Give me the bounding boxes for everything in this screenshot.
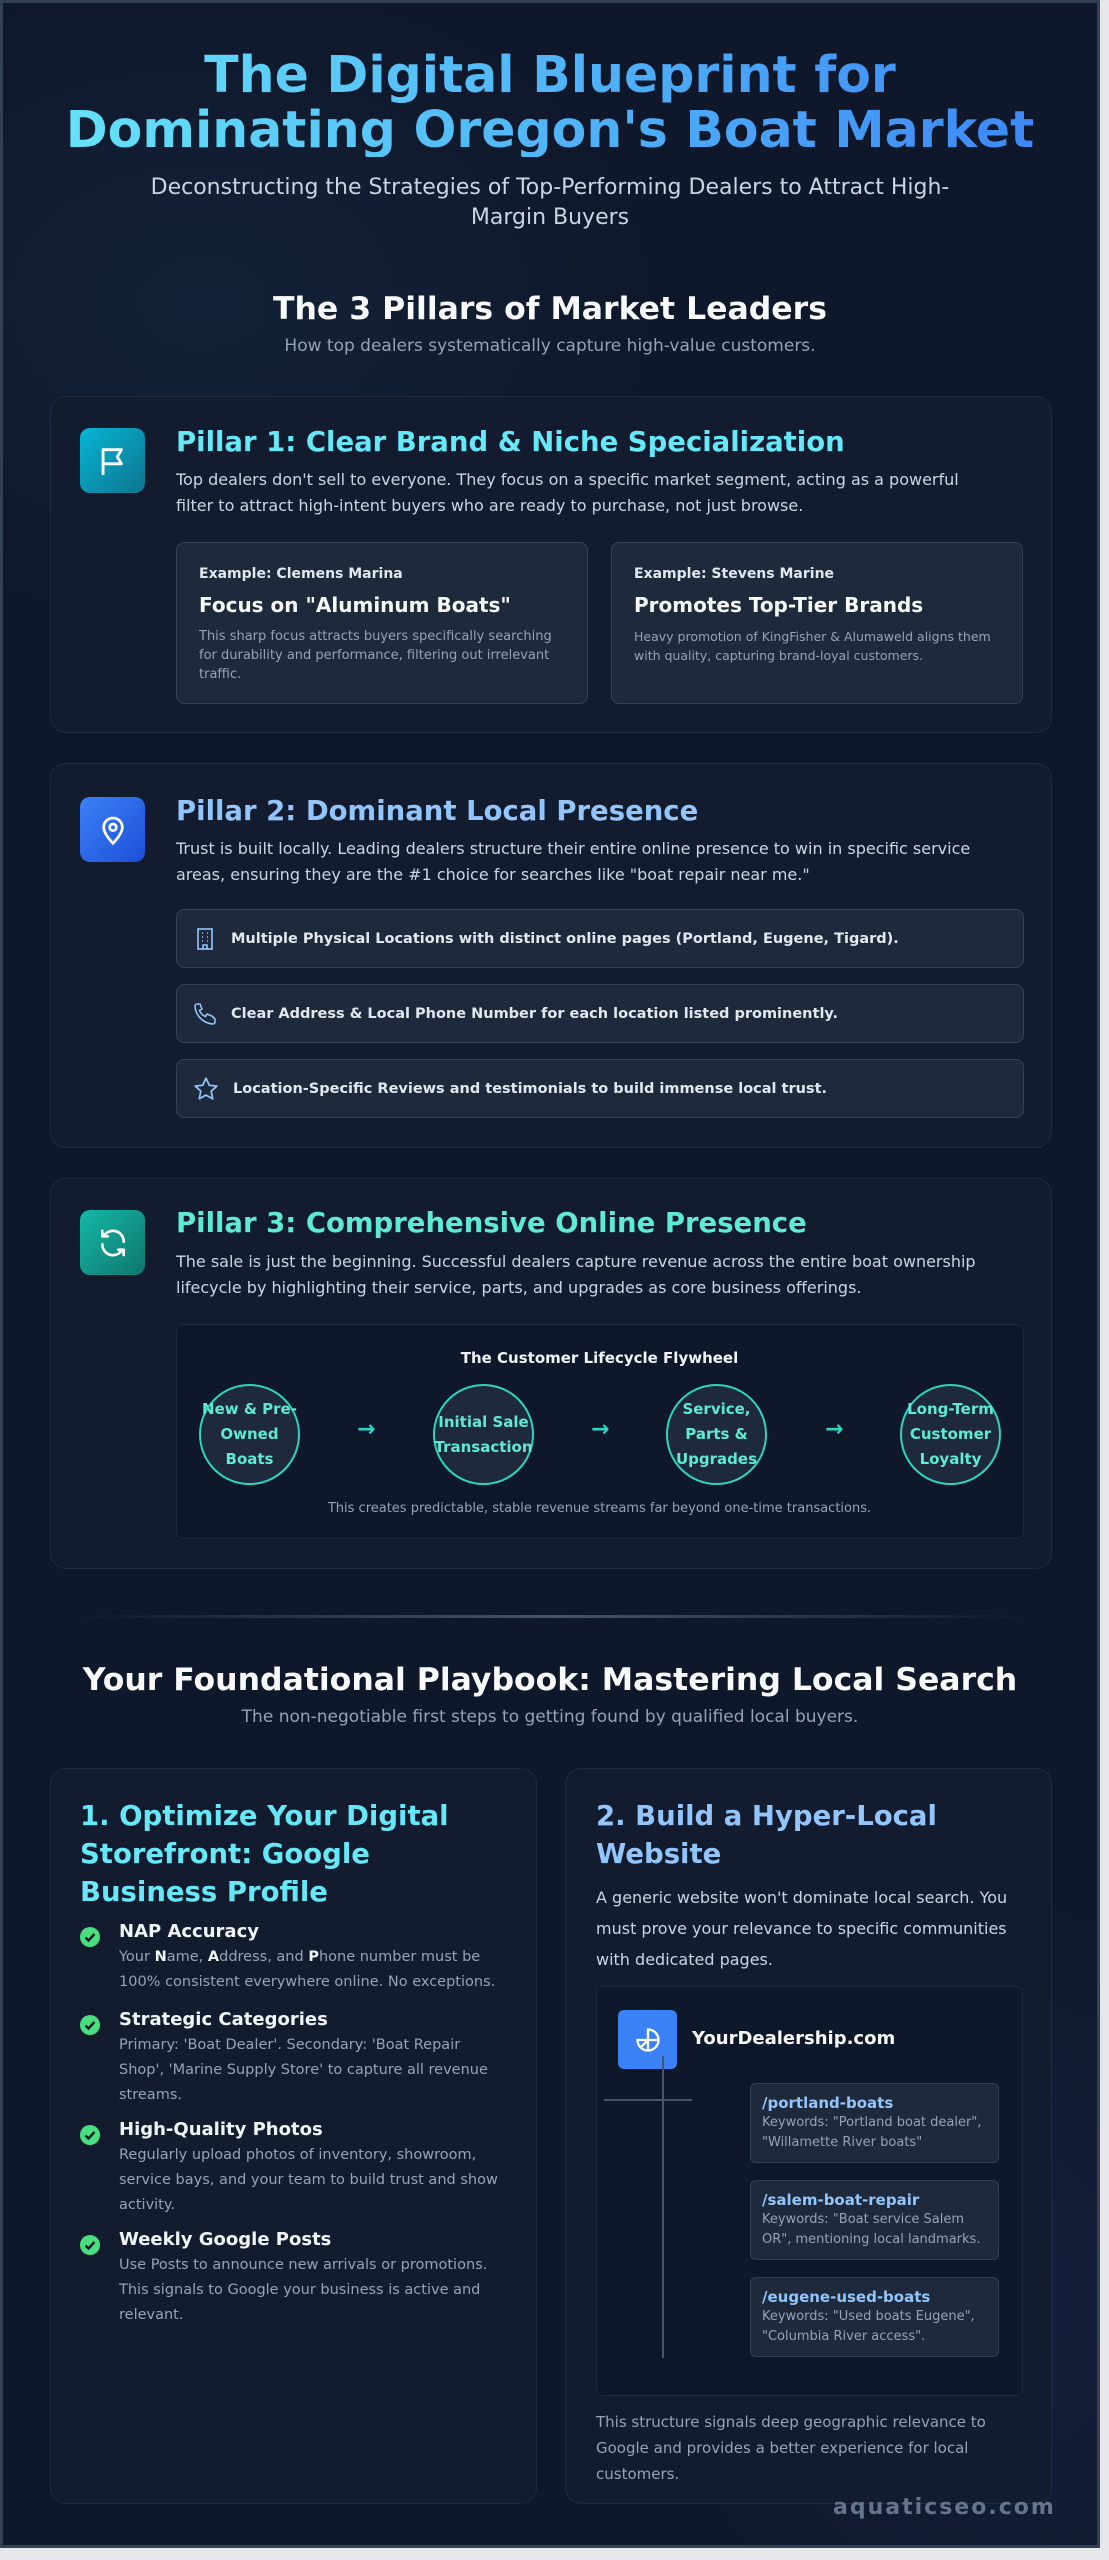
item: reviews: [176, 1059, 1024, 1118]
panel: pillar 2: [50, 763, 1052, 1148]
heading: pillar 1: Pillar 1: Clear Brand & Niche Specialization: [176, 426, 845, 458]
example: Clemens Marina: [176, 542, 588, 704]
step: service, parts & upgrades: [666, 1384, 767, 1485]
arrow: →: [825, 1417, 843, 1442]
step: initial sale: [433, 1384, 534, 1485]
flywheel caption: This creates predictable, stable revenue streams far beyond one-time transactions.: [328, 1501, 871, 1516]
heading: website: 2. Build a Hyper-Local Website: [596, 1800, 937, 1870]
icon: check: [80, 2015, 100, 2035]
section heading: playbook: Your Foundational Playbook: Mastering Local Search: [83, 1662, 1017, 1698]
example: Clemens Marina: Focus on "Aluminum Boats": [199, 593, 511, 617]
section heading: pillars: The 3 Pillars of Market Leaders: [273, 291, 827, 327]
icon: site logo: [618, 2010, 677, 2069]
icon: check: [80, 1927, 100, 1947]
page: eugene: /eugene-used-boats: [762, 2288, 930, 2306]
check item: photos: [80, 2119, 498, 2213]
example: Stevens Marine: Example: Stevens Marine: [634, 566, 834, 582]
flywheel title: The Customer Lifecycle Flywheel: [461, 1349, 738, 1367]
page: eugene: Keywords: "Used boats Eugene", "Columbia River access".: [762, 2309, 975, 2344]
heading: pillar 2: Pillar 2: Dominant Local Presence: [176, 795, 698, 827]
panel: pillar 3: [50, 1178, 1052, 1569]
check item: posts: [80, 2229, 487, 2323]
example: Stevens Marine: Promotes Top-Tier Brands: [634, 593, 923, 617]
icon: map pin: [80, 797, 145, 862]
item: multiple locations: Multiple Physical Locations with distinct online pages (Portland, Eugene, Tigard).: [231, 930, 899, 946]
panel: google business profile: Primary: 'Boat Dealer'. Secondary: 'Boat Repair Shop', 'Marine Supply Store' to capture all revenue streams.: [119, 2037, 488, 2103]
step: initial sale: Initial Sale: [438, 1412, 529, 1430]
arrow: →: [591, 1417, 609, 1442]
text: pillar 3 description: The sale is just the beginning. Successful dealers capture revenue across the entire boat ownership lifecycle by highlighting their service, parts, and upgrades as core business offerings.: [176, 1252, 976, 1297]
arrow: →: [357, 1417, 375, 1442]
item: reviews: Location-Specific Reviews and testimonials to build immense local trust.: [233, 1080, 827, 1096]
panel: google business profile: Regularly upload photos of inventory, showroom, service bays, and your team to build trust and show activity.: [119, 2147, 498, 2213]
step: service, parts & upgrades: Parts &: [685, 1425, 748, 1443]
item: multiple locations: [176, 909, 1024, 968]
step: long-term loyalty: Customer: [910, 1425, 991, 1443]
watermark: aquaticseo.com: [833, 2495, 1056, 2520]
step: new & pre-owned boats: Boats: [226, 1450, 273, 1468]
panel: pillar 1: [50, 396, 1052, 733]
example: Stevens Marine: [611, 542, 1023, 704]
item: address and phone: Clear Address & Local Phone Number for each location listed prominently.: [231, 1006, 838, 1022]
diagram: site structure: [596, 1986, 1023, 2396]
icon: check: [80, 2125, 100, 2145]
step: initial sale: Transaction: [434, 1438, 533, 1456]
page: portland: /portland-boats: [762, 2094, 893, 2112]
step: long-term loyalty: [900, 1384, 1001, 1485]
example: Stevens Marine: Heavy promotion of KingFisher & Alumaweld aligns them with quality, capturing brand-loyal customers.: [634, 629, 991, 663]
example: Clemens Marina: This sharp focus attracts buyers specifically searching for durability and performance, filtering out irrelevant traffic.: [199, 629, 552, 682]
check item: NAP: [80, 1921, 495, 1990]
icon: flag: [80, 428, 145, 493]
panel: hyper-local website: [565, 1768, 1052, 2504]
panel: google business profile: High-Quality Photos: [119, 2119, 323, 2140]
page: portland: Keywords: "Portland boat dealer", "Willamette River boats": [762, 2115, 981, 2150]
icon: check: [80, 2235, 100, 2255]
page: salem: /salem-boat-repair: [762, 2191, 919, 2209]
step: service, parts & upgrades: Upgrades: [676, 1450, 757, 1468]
page: eugene: [750, 2277, 999, 2357]
panel: google business profile: Your Name, Address, and Phone number must be 100% consistent everywhere online. No exceptions.: [119, 1949, 495, 1990]
step: service, parts & upgrades: Service,: [682, 1400, 751, 1418]
page: salem: Keywords: "Boat service Salem OR", mentioning local landmarks.: [762, 2212, 980, 2247]
text: website description: A generic website won't dominate local search. You must prove your relevance to specific communities with dedicated pages.: [596, 1888, 1007, 1969]
example: Clemens Marina: Example: Clemens Marina: [199, 566, 403, 582]
page: portland: [750, 2083, 999, 2163]
step: new & pre-owned boats: [199, 1384, 300, 1485]
panel: google business profile: NAP Accuracy: [119, 1921, 259, 1942]
check item: categories: [80, 2009, 488, 2103]
text: website caption: This structure signals deep geographic relevance to Google and provides a better experience for local customers.: [596, 2413, 986, 2483]
text: domain: YourDealership.com: [692, 2028, 895, 2049]
section subtitle: pillars: How top dealers systematically capture high-value customers.: [284, 336, 816, 356]
step: long-term loyalty: Loyalty: [920, 1450, 981, 1468]
panel: google business profile: Weekly Google Posts: [119, 2229, 331, 2250]
title: Dominating Oregon's Boat Market: [66, 100, 1034, 159]
step: new & pre-owned boats: New & Pre-: [202, 1400, 297, 1418]
text: pillar 1 description: Top dealers don't sell to everyone. They focus on a specific market segment, acting as a powerful filter to attract high-intent buyers who are ready to purchase, not just browse.: [176, 470, 959, 515]
subtitle: Deconstructing the Strategies of Top-Performing Dealers to Attract High-Margin Buyers: [151, 175, 949, 230]
section subtitle: playbook: The non-negotiable first steps to getting found by qualified local buyers.: [242, 1707, 858, 1727]
title: The Digital Blueprint for: [204, 45, 896, 104]
item: address and phone: [176, 984, 1024, 1043]
heading: GBP: 1. Optimize Your Digital Storefront: Google Business Profile: [80, 1800, 449, 1908]
panel: google business profile: Strategic Categories: [119, 2009, 328, 2030]
step: new & pre-owned boats: Owned: [220, 1425, 279, 1443]
step: long-term loyalty: Long-Term: [907, 1400, 994, 1418]
text: pillar 2 description: Trust is built locally. Leading dealers structure their entire online presence to win in specific service areas, ensuring they are the #1 choice for searches like "boat repair near me.": [176, 839, 970, 884]
panel: google business profile: [50, 1768, 537, 2504]
chart: customer lifecycle flywheel: [176, 1324, 1024, 1539]
heading: pillar 3: Pillar 3: Comprehensive Online Presence: [176, 1207, 807, 1239]
panel: google business profile: Use Posts to announce new arrivals or promotions. This signals to Google your business is active and relevant.: [119, 2257, 487, 2323]
title: [3, 47, 1097, 157]
page: salem: [750, 2180, 999, 2260]
icon: refresh cycle: [80, 1210, 145, 1275]
